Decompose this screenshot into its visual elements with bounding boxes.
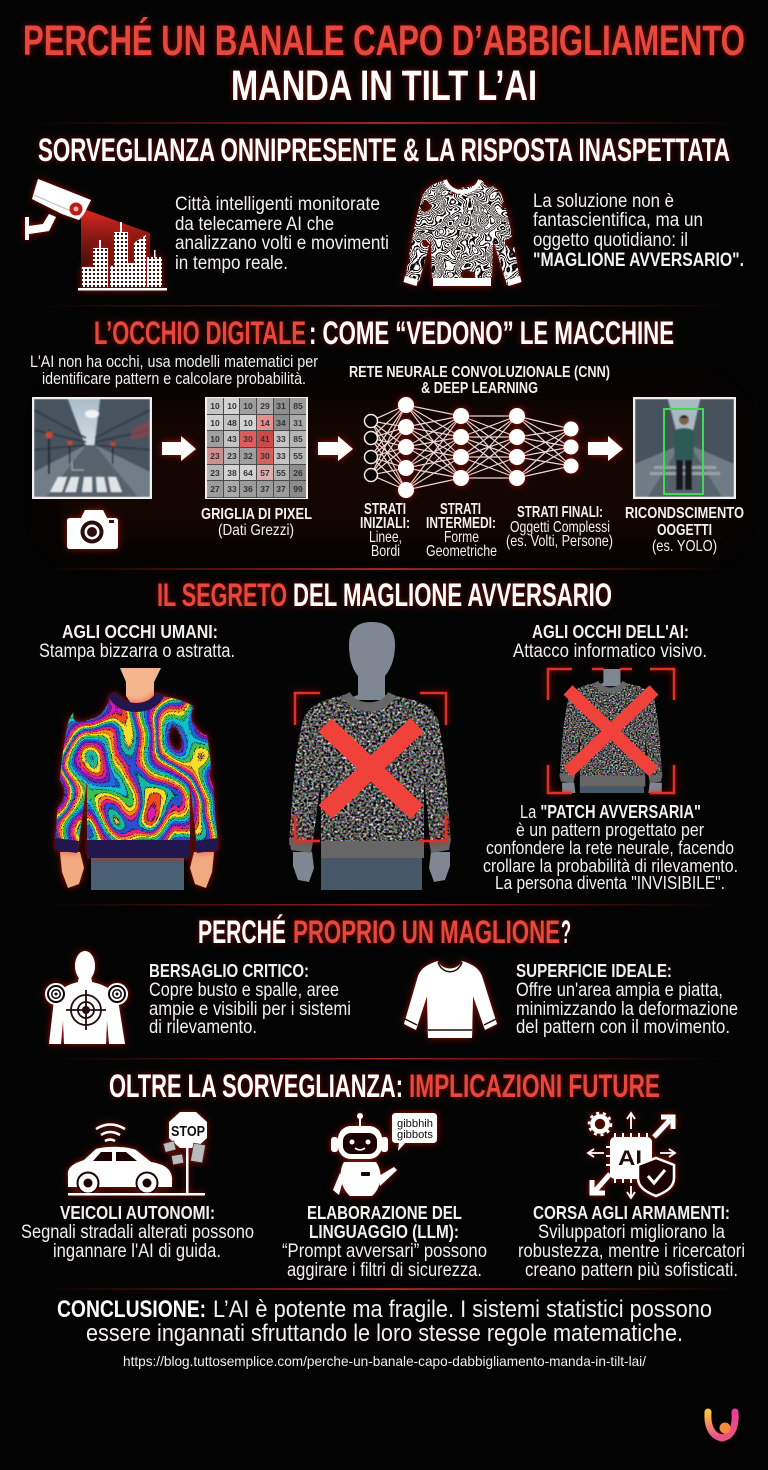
- chart: pixel grid: 36: [243, 484, 253, 494]
- chart: pixel grid: 10: [210, 434, 220, 444]
- text: la soluzione: fantascientifica, ma un: [533, 210, 703, 231]
- heading: cnn: & DEEP LEARNING: [421, 380, 538, 397]
- conclusion: essere ingannati sfruttando le loro stesse regole matematiche.: [86, 1320, 683, 1347]
- label: riconoscimento oggetti: [625, 505, 744, 555]
- illustration: rainbow sweater: [50, 668, 224, 892]
- label: occhi umani: [39, 622, 235, 662]
- chart: pixel grid: 10: [210, 418, 220, 428]
- label: strati intermedi: INTERMEDI:: [426, 515, 496, 532]
- text: corsa agli armamenti: Sviluppatori migliorano la: [538, 1222, 725, 1243]
- chart: pixel grid: 99: [293, 484, 303, 494]
- label: griglia di pixel: GRIGLIA DI PIXEL: [201, 506, 312, 523]
- chart: pixel grid: 37: [276, 484, 286, 494]
- chart: pixel grid: 10: [243, 401, 253, 411]
- label: strati finali: (es. Volti, Persone): [506, 533, 613, 550]
- text: elaborazione del linguaggio: ELABORAZIONE DEL: [307, 1203, 462, 1223]
- text: veicoli autonomi: [21, 1203, 254, 1262]
- text: la soluzione: [533, 191, 744, 271]
- text: superficie ideale: Offre un'area ampia e piatta,: [516, 980, 723, 1001]
- text: elaborazione del linguaggio: aggirare i filtri di sicurezza.: [287, 1260, 482, 1281]
- chart: pixel grid: 34: [276, 418, 286, 428]
- text: superficie ideale: [516, 961, 738, 1038]
- text: patch avversaria: La "PATCH AVVERSARIA": [520, 801, 701, 822]
- heading: perché proprio un maglione: [198, 914, 571, 950]
- label: strati intermedi: STRATI: [440, 501, 481, 518]
- text: città intelligenti: [175, 194, 389, 274]
- text: la soluzione: La soluzione non è: [533, 191, 674, 212]
- icon: robot with speech bubble: gibbhih: [397, 1118, 433, 1130]
- panel: sorveglianza: [25, 132, 744, 295]
- label: occhi dell'ai: [513, 622, 707, 662]
- text: città intelligenti: Città intelligenti monitorate: [175, 194, 380, 215]
- label: riconoscimento oggetti: OOGETTI: [657, 522, 712, 539]
- icon: ai chip, gear, shield, arrows: [588, 1113, 675, 1198]
- icon: photo camera: [67, 510, 118, 549]
- chart: pixel grid: 30: [260, 451, 270, 461]
- title: [23, 17, 745, 110]
- heading: occhio digitale: L’OCCHIO DIGITALE: [94, 315, 306, 351]
- image: street scene: [32, 397, 152, 499]
- heading: implicazioni future: IMPLICAZIONI FUTURE: [409, 1068, 660, 1104]
- text: elaborazione del linguaggio: [282, 1203, 487, 1281]
- label: strati iniziali: Bordi: [371, 543, 400, 560]
- chart: pixel grid: 10: [227, 401, 237, 411]
- chart: pixel grid: 27: [210, 484, 220, 494]
- heading: il segreto: IL SEGRETO: [157, 577, 287, 613]
- text: bersaglio critico: [149, 961, 351, 1038]
- text: corsa agli armamenti: CORSA AGLI ARMAMENTI:: [533, 1203, 730, 1223]
- chart: pixel grid: 64: [243, 468, 253, 478]
- chart: pixel grid: 10: [210, 401, 220, 411]
- text: città intelligenti: da telecamere AI che: [175, 214, 334, 235]
- chart: pixel grid: 26: [293, 468, 303, 478]
- text: patch avversaria: [483, 801, 738, 893]
- text: veicoli autonomi: ingannare l'AI di guida.: [53, 1241, 221, 1262]
- label: occhi umani: Stampa bizzarra o astratta.: [39, 641, 235, 662]
- icon: robot with speech bubble: gibbots: [397, 1129, 433, 1141]
- chart: pixel grid: 33: [276, 434, 286, 444]
- label: strati iniziali: Linee,: [369, 529, 402, 546]
- text: la soluzione: oggetto quotidiano: il: [533, 230, 688, 251]
- label: occhi dell'ai: Attacco informatico visivo.: [513, 641, 707, 662]
- chart: pixel grid: 14: [260, 418, 270, 428]
- text: patch avversaria: è un pattern progettato per: [516, 819, 704, 840]
- chart: pixel grid: 55: [293, 451, 303, 461]
- chart: pixel grid: 29: [260, 401, 270, 411]
- conclusion: L’AI è potente ma fragile. I sistemi statistici possono: [213, 1296, 712, 1323]
- text: intro: identificare pattern e calcolare probabilità.: [42, 369, 306, 388]
- label: strati iniziali: [360, 501, 410, 560]
- text: patch avversaria: La persona diventa "INVISIBILE".: [495, 872, 725, 893]
- icon: patterned sweater: [400, 176, 526, 292]
- chart: pixel grid: 57: [260, 468, 270, 478]
- label: strati iniziali: INIZIALI:: [360, 515, 410, 532]
- text: città intelligenti: in tempo reale.: [175, 253, 288, 274]
- label: strati intermedi: Forme: [444, 529, 479, 546]
- conclusion: [57, 1296, 712, 1347]
- panel: segreto del maglione: [30, 577, 738, 893]
- arrow: to detection: [588, 436, 623, 461]
- label: strati intermedi: [426, 501, 497, 560]
- text: superficie ideale: del pattern con il movimento.: [516, 1017, 730, 1038]
- label: riconoscimento oggetti: RICONDSCIMENTO: [625, 505, 744, 522]
- icon: autonomous car and stop sign: STOP: [171, 1123, 205, 1140]
- chart: pixel grid: 31: [276, 401, 286, 411]
- chart: pixel grid: 85: [293, 434, 303, 444]
- heading: perché proprio un maglione: ?: [561, 914, 571, 950]
- source url: https://blog.tuttosemplice.com/perche-un-banale-capo-dabbigliamento-manda-in-tilt-lai/: [123, 1353, 646, 1369]
- chart: pixel grid: 23: [210, 451, 220, 461]
- label: strati iniziali: STRATI: [364, 501, 406, 518]
- text: corsa agli armamenti: creano pattern più sofisticati.: [525, 1260, 738, 1281]
- icon: autonomous car and stop sign: [68, 1112, 207, 1196]
- heading: il segreto: DEL MAGLIONE AVVERSARIO: [293, 577, 612, 613]
- chart: pixel grid: 85: [293, 401, 303, 411]
- chart: pixel grid: 33: [276, 451, 286, 461]
- text: superficie ideale: SUPERFICIE IDEALE:: [516, 961, 672, 981]
- text: superficie ideale: minimizzando la deformazione: [516, 999, 738, 1020]
- conclusion: CONCLUSIONE:: [57, 1296, 206, 1323]
- chart: pixel grid: 31: [293, 418, 303, 428]
- icon: ai chip, gear, shield, arrows: AI: [618, 1147, 642, 1170]
- heading: il segreto: [157, 577, 612, 613]
- chart: neural network: [364, 397, 578, 498]
- chart: pixel grid: 10: [243, 418, 253, 428]
- heading: cnn: [349, 364, 610, 397]
- title: MANDA IN TILT L’AI: [231, 62, 537, 110]
- text: città intelligenti: analizzano volti e movimenti: [175, 233, 389, 254]
- label: griglia di pixel: (Dati Grezzi): [218, 522, 294, 539]
- text: corsa agli armamenti: [518, 1203, 745, 1281]
- label: strati intermedi: Geometriche: [426, 543, 497, 560]
- text: elaborazione del linguaggio: “Prompt avversari” possono: [282, 1241, 487, 1262]
- logo: [708, 1412, 735, 1438]
- arrow: to pixel grid: [162, 436, 196, 461]
- chart: pixel grid: 55: [276, 468, 286, 478]
- chart: pixel grid: 38: [227, 468, 237, 478]
- text: bersaglio critico: di rilevamento.: [149, 1017, 257, 1038]
- image: person detected: [633, 397, 736, 499]
- chart: pixel grid: 30: [243, 434, 253, 444]
- icon: robot with speech bubble: [331, 1113, 437, 1196]
- text: bersaglio critico: BERSAGLIO CRITICO:: [149, 961, 309, 981]
- illustration: small adversarial figure: [542, 662, 680, 800]
- label: riconoscimento oggetti: (es. YOLO): [652, 538, 717, 555]
- label: occhi dell'ai: AGLI OCCHI DELL'AI:: [532, 622, 689, 642]
- heading: cnn: RETE NEURALE CONVOLUZIONALE (CNN): [349, 364, 610, 381]
- chart: pixel grid: 32: [243, 451, 253, 461]
- arrow: to neural network: [318, 436, 353, 461]
- label: strati finali: STRATI FINALI:: [517, 504, 603, 521]
- text: intro: L'AI non ha occhi, usa modelli matematici per: [30, 352, 318, 371]
- heading: implicazioni future: OLTRE LA SORVEGLIANZA:: [109, 1068, 403, 1104]
- text: intro: [30, 352, 318, 388]
- chart: pixel grid: 41: [260, 434, 270, 444]
- chart: pixel grid: [205, 397, 308, 499]
- illustration: central figure with adversarial sweater: [289, 622, 451, 890]
- panel: perché un maglione: [46, 914, 738, 1044]
- text: elaborazione del linguaggio: LINGUAGGIO (LLM):: [309, 1222, 459, 1242]
- label: strati finali: Oggetti Complessi: [510, 519, 610, 536]
- chart: pixel grid: 23: [227, 451, 237, 461]
- heading: perché proprio un maglione: PROPRIO UN MAGLIONE: [293, 914, 560, 950]
- label: occhi umani: AGLI OCCHI UMANI:: [62, 622, 218, 642]
- chart: pixel grid: 33: [227, 484, 237, 494]
- icon: plain sweater: [404, 961, 497, 1038]
- chart: pixel grid: 43: [227, 434, 237, 444]
- text: veicoli autonomi: Segnali stradali alterati possono: [21, 1222, 254, 1243]
- label: strati finali: [506, 504, 613, 550]
- label: griglia di pixel: [201, 506, 312, 539]
- chart: pixel grid: 48: [227, 418, 237, 428]
- chart: pixel grid: 23: [210, 468, 220, 478]
- heading: perché proprio un maglione: PERCHÉ: [198, 914, 286, 950]
- icon: body with targets: [46, 951, 127, 1044]
- chart: pixel grid: 37: [260, 484, 270, 494]
- icon: security camera and city: [25, 179, 167, 290]
- panel: occhio digitale: [30, 315, 744, 560]
- text: veicoli autonomi: VEICOLI AUTONOMI:: [60, 1203, 215, 1223]
- text: bersaglio critico: Copre busto e spalle, aree: [149, 980, 339, 1001]
- heading: occhio digitale: [94, 315, 674, 351]
- text: bersaglio critico: ampie e visibili per i sistemi: [149, 999, 351, 1020]
- panel: oltre la sorveglianza: [21, 1068, 745, 1281]
